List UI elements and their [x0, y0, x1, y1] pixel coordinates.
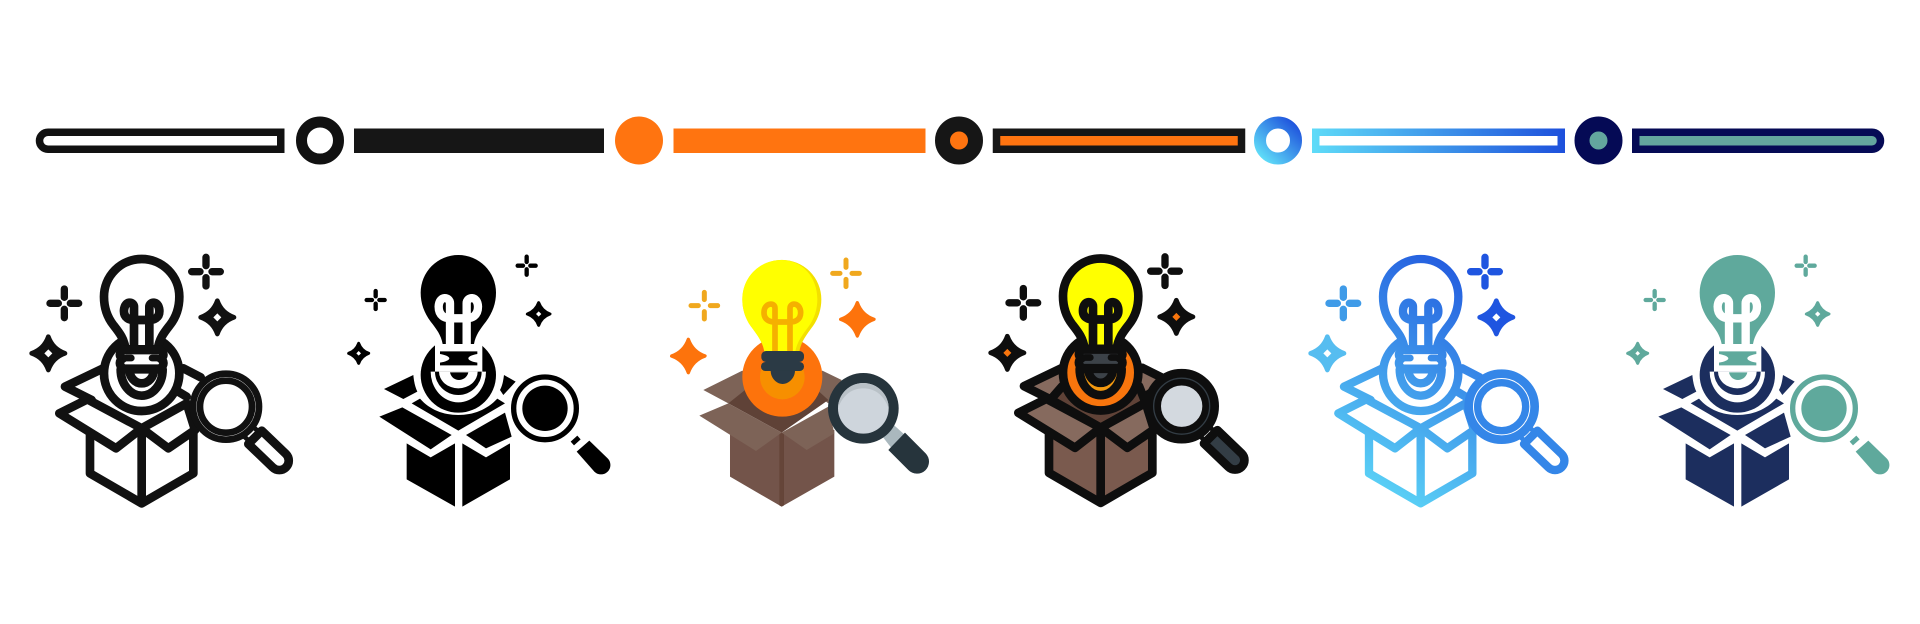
icon 6: navy and teal glyph — [1628, 255, 1889, 507]
box back flaps — [1024, 368, 1169, 399]
inner arc — [1408, 369, 1433, 383]
base notches — [126, 348, 157, 368]
sparkles — [32, 257, 234, 370]
box back flaps — [1344, 368, 1480, 400]
box pieces — [379, 375, 516, 507]
box front flaps — [1018, 399, 1154, 448]
icon 1: black outline — [32, 257, 289, 503]
base notches — [1085, 347, 1116, 367]
dot: navy with teal — [1582, 124, 1615, 157]
outer arc — [1400, 369, 1442, 396]
box walls — [1049, 426, 1152, 503]
inner arc — [1088, 369, 1113, 383]
filament — [1718, 298, 1757, 345]
bulb base — [1719, 351, 1756, 365]
magnifier — [1787, 371, 1889, 474]
sparkles — [1628, 257, 1829, 363]
bar: outline — [40, 132, 281, 149]
box centre edge — [779, 433, 784, 507]
outer arc — [1080, 369, 1122, 395]
box front flaps — [699, 403, 834, 451]
box interior — [728, 383, 828, 433]
socket sphere — [104, 336, 179, 411]
box interior — [1051, 386, 1146, 428]
filament — [124, 303, 159, 348]
sparkles — [1311, 257, 1513, 370]
magnifier — [193, 374, 289, 470]
bar: navy with teal — [1636, 132, 1880, 149]
bar: gradient outline — [1316, 132, 1561, 149]
box back flaps — [65, 368, 201, 400]
base notches — [1405, 348, 1436, 368]
bulb base — [761, 351, 804, 384]
box back flaps — [703, 371, 842, 403]
dot: orange — [615, 116, 663, 164]
bulb glass — [104, 259, 179, 349]
dot: gradient ring — [1260, 122, 1296, 158]
bulb — [1700, 255, 1775, 344]
magnifier — [1469, 374, 1564, 470]
magnifier — [828, 373, 929, 474]
bulb base — [1399, 350, 1442, 369]
dot: outline — [302, 122, 338, 159]
box walls — [90, 427, 193, 503]
style legend strip — [40, 116, 1880, 164]
icon 4: filled outline colour — [991, 257, 1244, 503]
socket sphere — [1700, 337, 1775, 413]
icon 2: black glyph — [349, 255, 610, 507]
socket sphere — [421, 337, 496, 413]
icon 3: flat colour — [672, 260, 929, 507]
box walls — [1369, 427, 1472, 503]
magnifier — [1149, 373, 1244, 470]
sparkles — [991, 257, 1193, 369]
outer arc — [121, 369, 163, 396]
socket sphere — [742, 337, 822, 417]
sparkles — [672, 260, 874, 373]
box walls — [730, 430, 834, 507]
filament — [439, 298, 478, 345]
magnifier — [508, 371, 610, 474]
socket sphere — [1063, 335, 1138, 410]
inner arc — [129, 369, 154, 383]
filament — [764, 304, 801, 351]
box pieces — [1658, 375, 1795, 507]
icon 5: gradient outline — [1311, 257, 1564, 503]
bar: black outline with orange — [996, 132, 1242, 149]
bulb glass — [1383, 259, 1458, 349]
socket sphere — [1383, 336, 1458, 411]
bulb highlight — [742, 260, 817, 352]
bulb — [742, 260, 821, 352]
dot: black with orange — [942, 124, 976, 157]
filament — [1083, 302, 1118, 348]
bulb base — [1079, 349, 1122, 368]
bulb glass — [1063, 258, 1138, 349]
bulb base — [440, 351, 477, 365]
bulb — [421, 255, 496, 344]
filament — [1403, 303, 1438, 348]
box front flaps — [1338, 399, 1474, 448]
sphere inner glow — [760, 355, 805, 399]
bar: solid black — [354, 128, 604, 153]
sparkles — [349, 257, 550, 363]
bulb base — [120, 350, 163, 369]
box front flaps — [59, 399, 195, 448]
bar: orange — [674, 128, 926, 153]
